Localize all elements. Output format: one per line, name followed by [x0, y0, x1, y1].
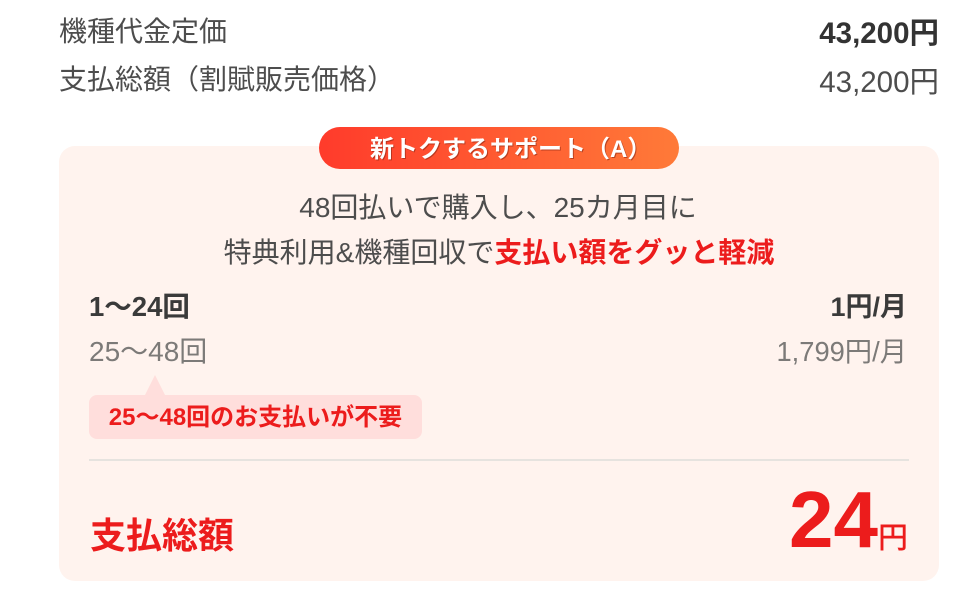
row label: 25 to 48: 25〜48回: [89, 336, 207, 367]
badge: support program name: 新トクするサポート（A）: [370, 136, 651, 163]
callout pointer: [145, 375, 165, 395]
label: device list price: 機種代金定価: [59, 16, 227, 47]
label: total: 支払総額: [90, 515, 234, 556]
row value: 25 to 48: 1,799円/月: [776, 336, 907, 367]
value: total payment: 43,200円: [819, 66, 939, 99]
value: total: 24円: [789, 475, 908, 564]
callout body: 25〜48回のお支払いが不要: [109, 404, 402, 431]
value: device list price: 43,200円: [819, 17, 939, 50]
callout: no payment needed: [89, 376, 422, 439]
label: total payment: 支払総額（割賦販売価格）: [59, 64, 395, 95]
badge: support program name: [319, 127, 679, 169]
row label: 1 to 24: 1〜24回: [89, 291, 190, 322]
description line 1: 48回払いで購入し、25カ月目に: [299, 192, 697, 223]
description line 2: 特典利用&機種回収で支払い額をグッと軽減: [224, 237, 774, 268]
callout body: [89, 395, 422, 439]
row value: 1 to 24: 1円/月: [830, 292, 907, 322]
panel: support program: [59, 146, 939, 581]
